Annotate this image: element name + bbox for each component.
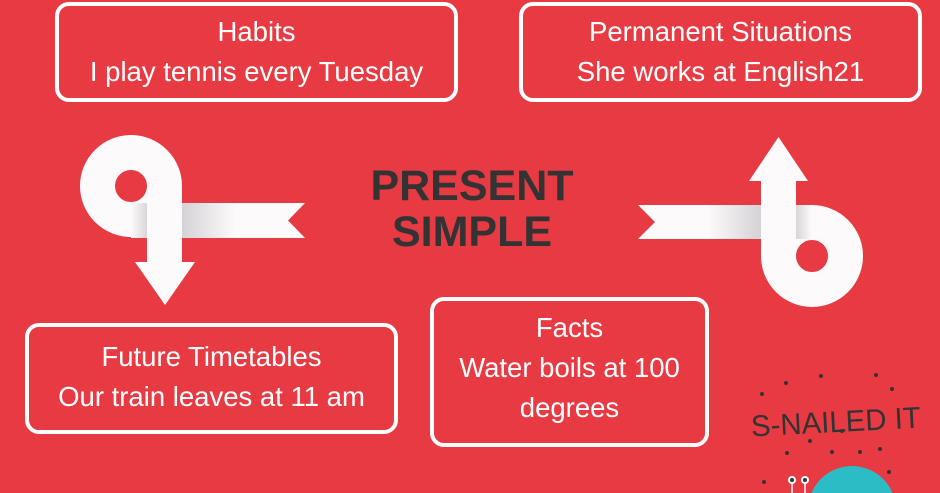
box: facts: degrees	[520, 392, 619, 423]
logo: s-nailed it	[750, 373, 922, 493]
arrow: right loop up	[638, 137, 846, 290]
logo: s-nailed it: S-NAILED IT	[750, 402, 922, 443]
box: permanent situations	[519, 2, 922, 102]
box: future timetables: Our train leaves at 11 am	[58, 381, 365, 412]
box: facts: Facts	[536, 312, 603, 343]
box: habits: I play tennis every Tuesday	[90, 56, 423, 87]
title	[370, 162, 574, 256]
title: PRESENT	[370, 162, 574, 210]
box: permanent situations: She works at English21	[577, 56, 864, 87]
title: SIMPLE	[392, 208, 552, 256]
box: future timetables: Future Timetables	[101, 341, 322, 372]
box: facts	[430, 297, 709, 447]
box: habits: Habits	[218, 16, 295, 47]
arrow: left loop down	[98, 152, 305, 305]
box: habits	[55, 2, 458, 102]
box: facts: Water boils at 100	[459, 352, 680, 383]
box: future timetables	[25, 323, 398, 434]
box: permanent situations: Permanent Situations	[589, 16, 852, 47]
